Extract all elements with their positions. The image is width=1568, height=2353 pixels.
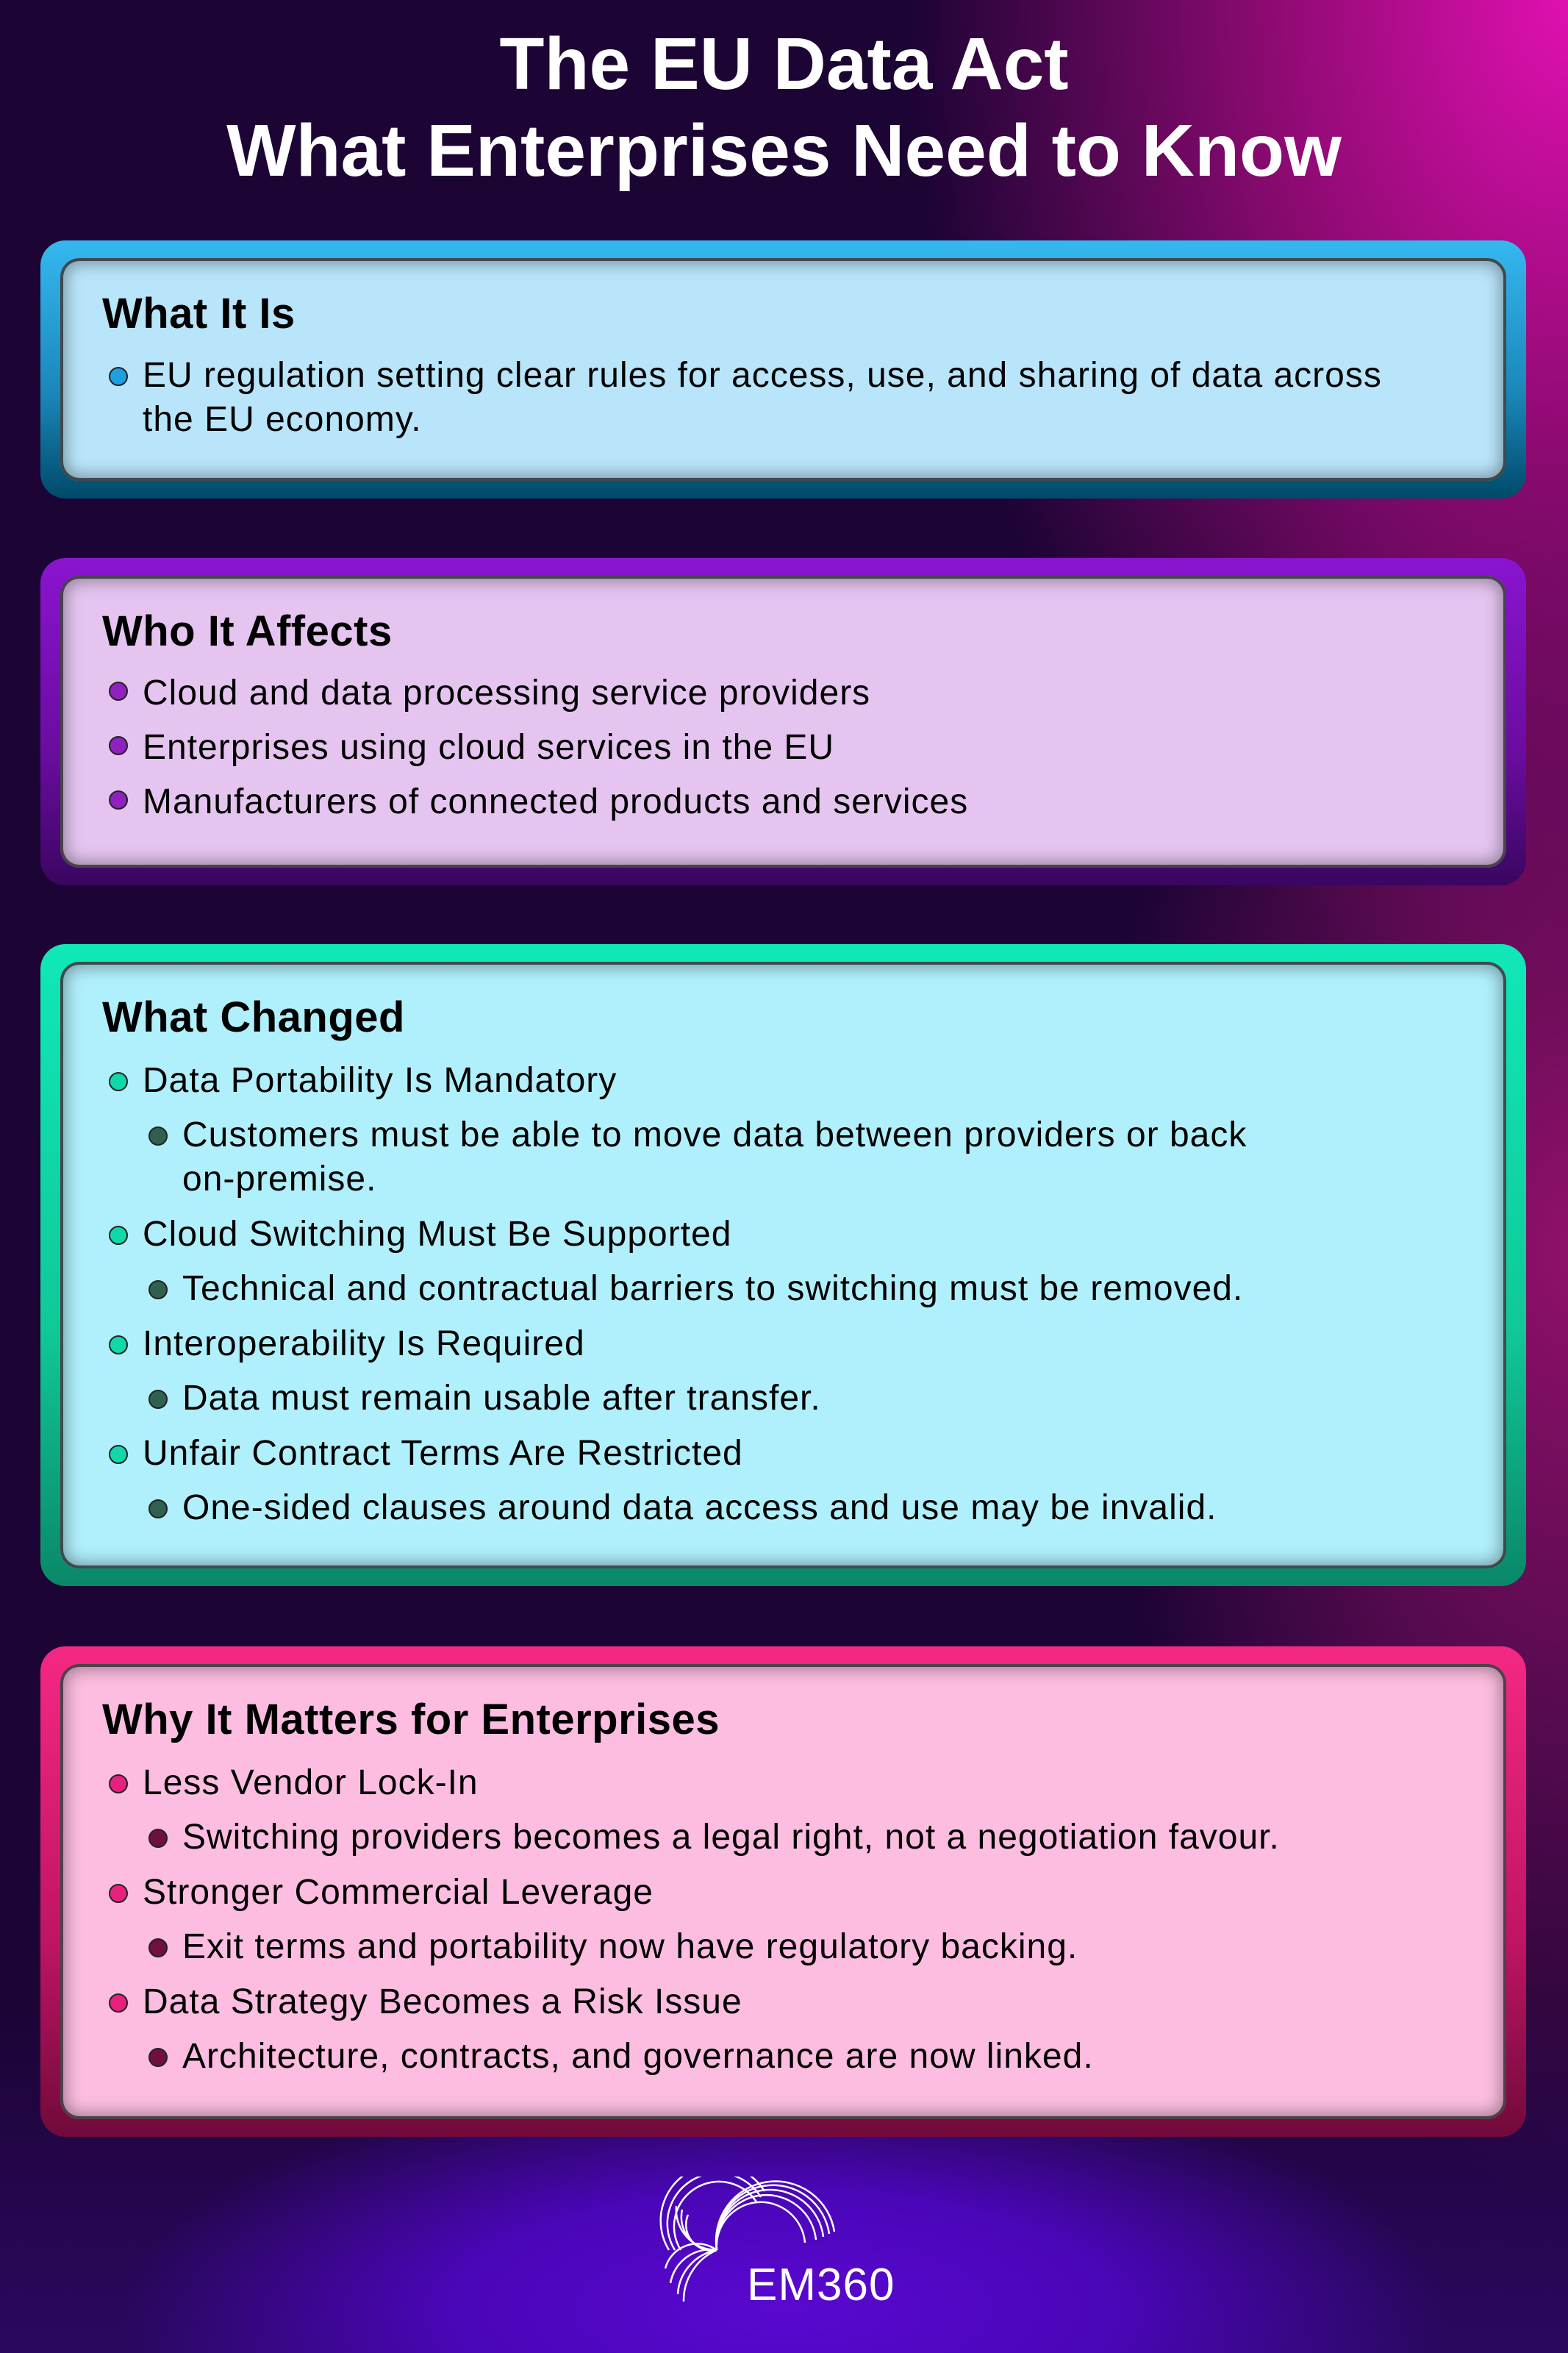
bullet list: Enterprises using cloud services in the EU	[143, 728, 834, 767]
bullet list: Interoperability Is Required	[143, 1324, 585, 1363]
panel: why it matters	[40, 1646, 1526, 2137]
bullet list: Data Portability Is Mandatory	[143, 1061, 617, 1100]
bullet list: Stronger Commercial Leverage	[143, 1873, 654, 1912]
bullet list: Data must remain usable after transfer.	[182, 1379, 821, 1418]
bullet list: Unfair Contract Terms Are Restricted	[143, 1434, 743, 1473]
bullet list	[109, 674, 968, 821]
heading: what it is: What It Is	[102, 290, 296, 338]
bullet list	[109, 1061, 1247, 1527]
bullet list: One-sided clauses around data access and use may be invalid.	[182, 1488, 1217, 1527]
title: The EU Data Act	[499, 23, 1069, 105]
heading: who it affects: Who It Affects	[102, 607, 393, 655]
text block	[143, 356, 1382, 439]
title: What Enterprises Need to Know	[226, 110, 1342, 192]
bullet dot	[109, 367, 128, 386]
bullet list: Cloud and data processing service providers	[143, 674, 870, 713]
text block: EU regulation setting clear rules for access, use, and sharing of data across	[143, 356, 1382, 395]
panel: who it affects	[40, 558, 1526, 885]
panel: what it is	[40, 240, 1526, 499]
title	[226, 23, 1342, 192]
text block: the EU economy.	[143, 400, 422, 439]
bullet list: Exit terms and portability now have regulatory backing.	[182, 1927, 1078, 1966]
bullet list: Less Vendor Lock-In	[143, 1763, 479, 1802]
bullet list: Cloud Switching Must Be Supported	[143, 1215, 731, 1254]
panel: what changed	[40, 944, 1526, 1586]
heading: what changed: What Changed	[102, 993, 405, 1041]
bullet list: Switching providers becomes a legal right, not a negotiation favour.	[182, 1818, 1280, 1857]
icon: cloud arcs	[659, 2177, 835, 2302]
bullet list: Customers must be able to move data between providers or back	[182, 1115, 1247, 1154]
bullet list: Data Strategy Becomes a Risk Issue	[143, 1982, 742, 2021]
bullet list: on-premise.	[182, 1160, 376, 1199]
bullet list: Technical and contractual barriers to switching must be removed.	[182, 1269, 1243, 1308]
logo: EM360	[659, 2177, 895, 2310]
heading: why it matters: Why It Matters for Enterprises	[102, 1696, 720, 1743]
bullet list: Manufacturers of connected products and services	[143, 782, 968, 821]
bullet list	[109, 1763, 1280, 2076]
bullet list: Architecture, contracts, and governance are now linked.	[182, 2037, 1094, 2076]
logo text: EM360	[747, 2260, 895, 2310]
